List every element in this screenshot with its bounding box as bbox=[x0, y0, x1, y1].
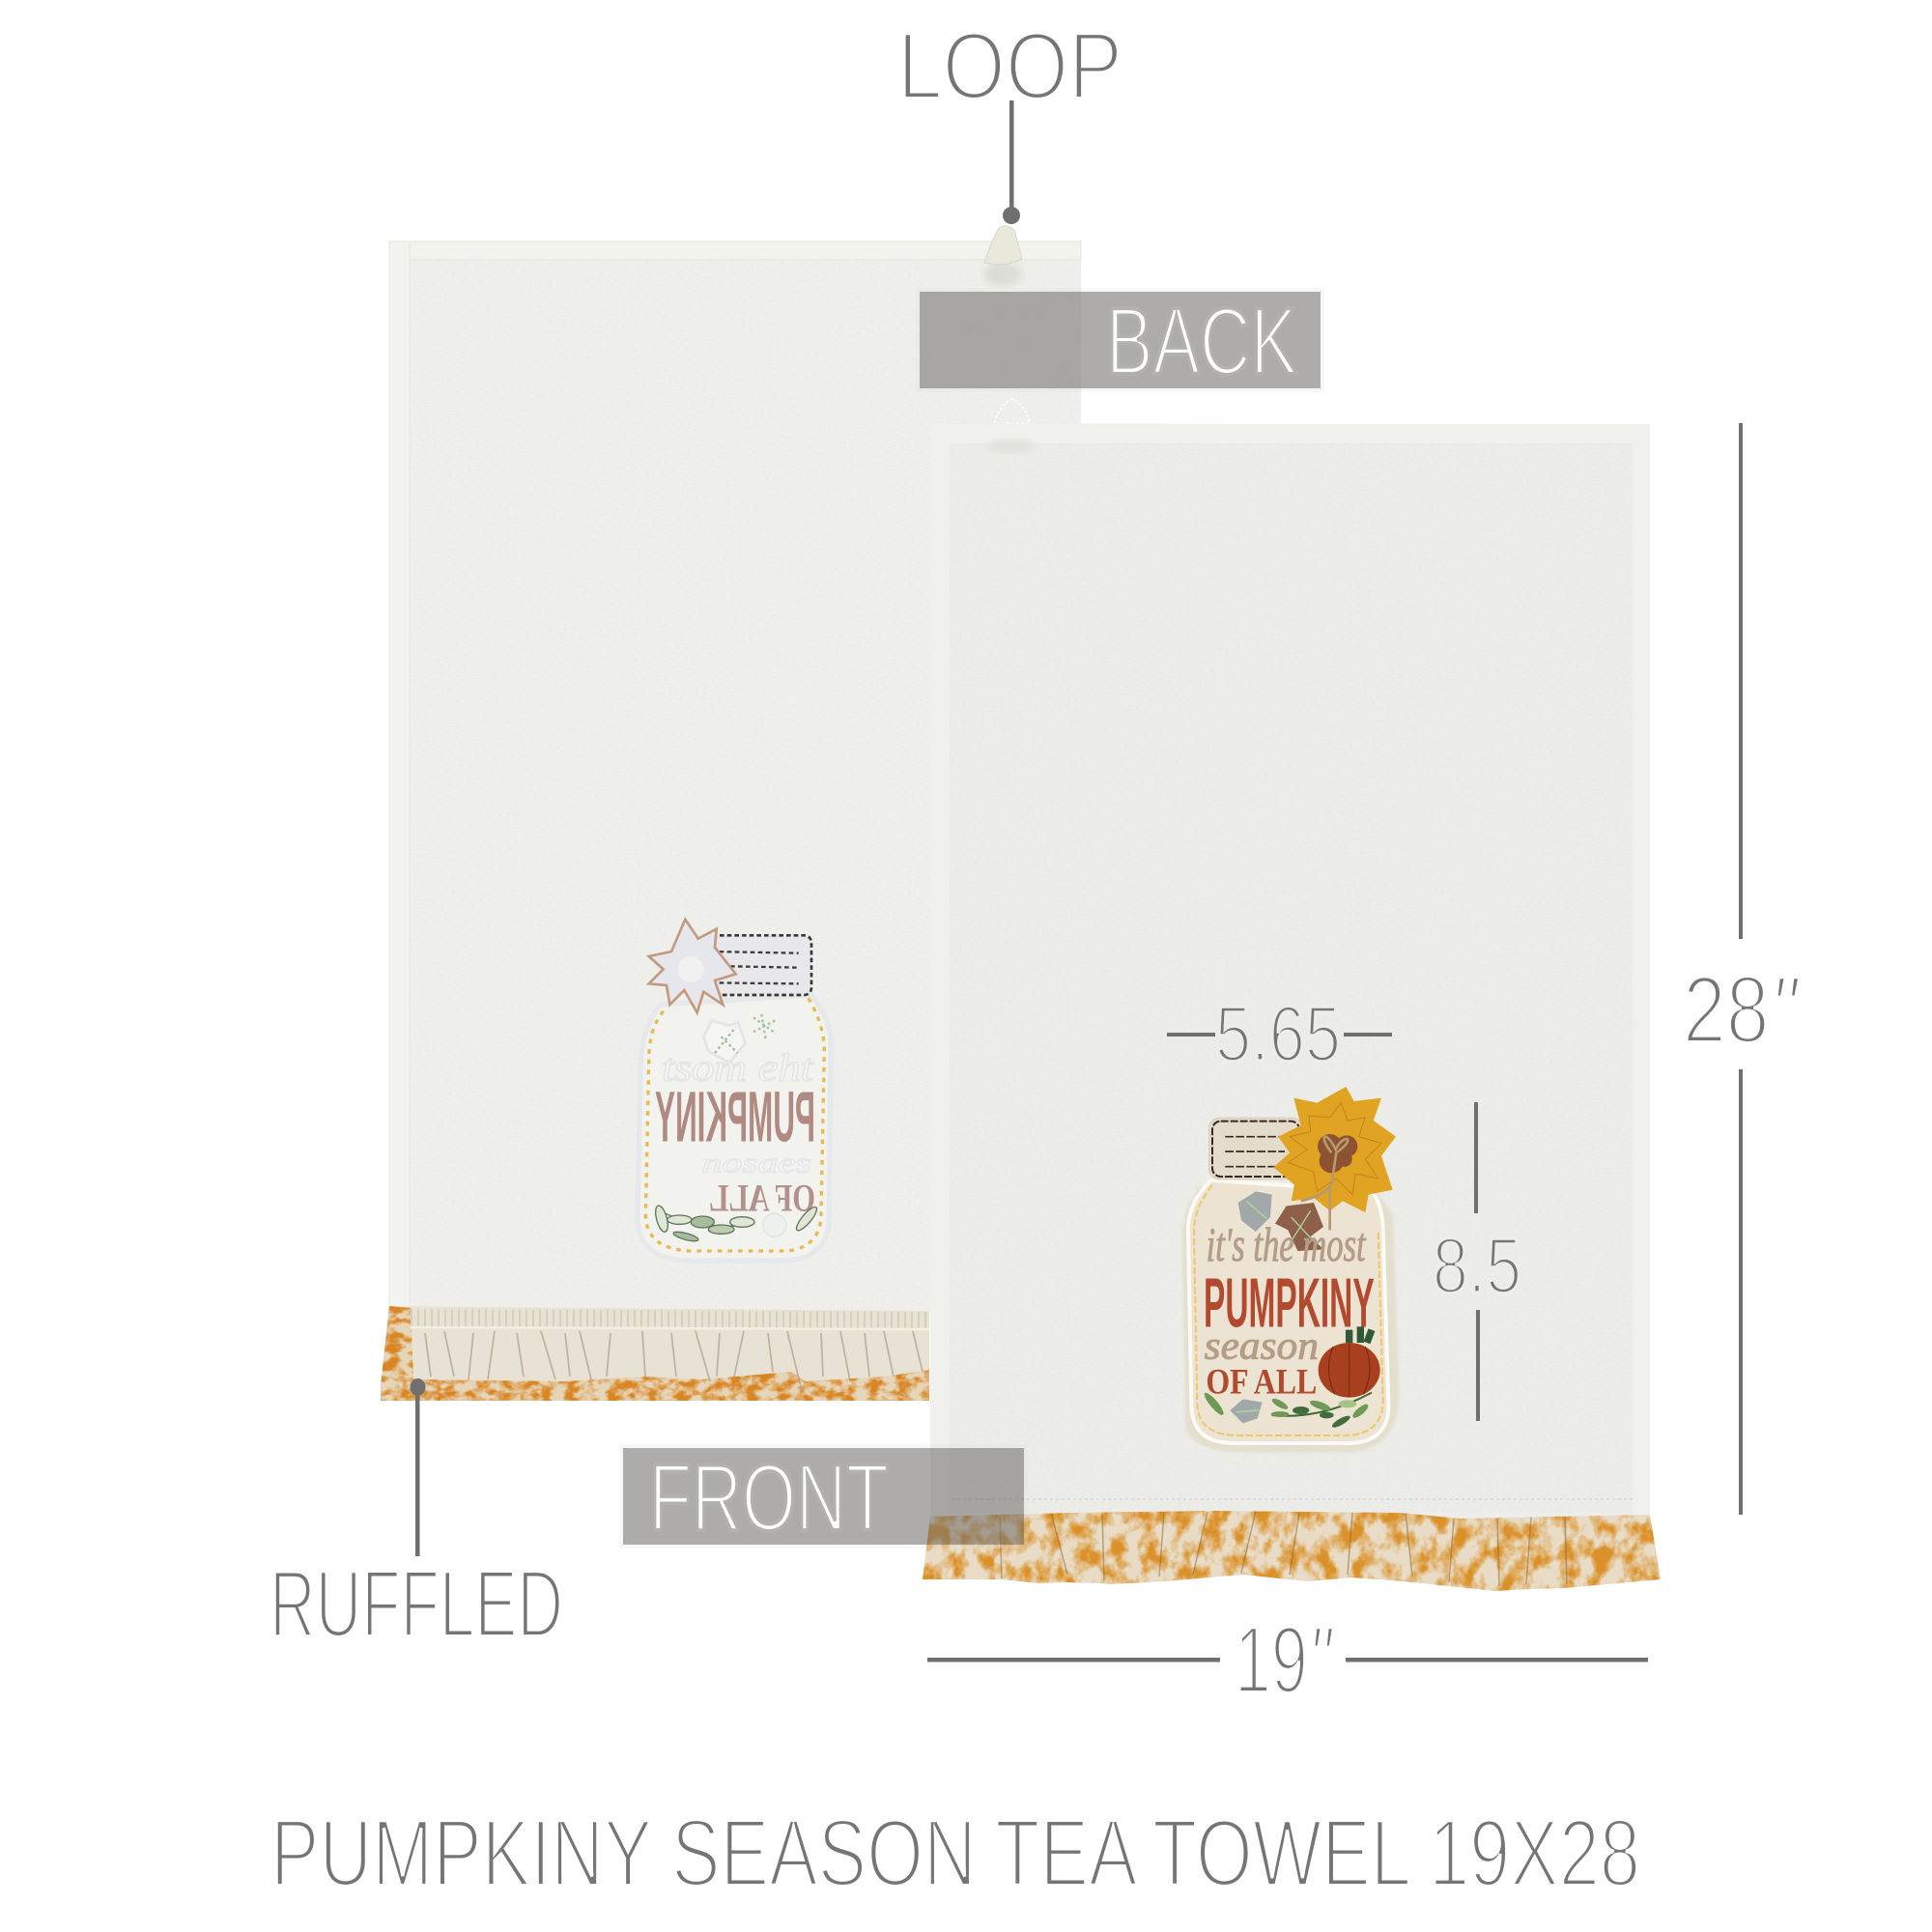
panel: front embroidered jar patch bbox=[1182, 1087, 1399, 1452]
LOOP text: LOOP bbox=[897, 13, 1122, 119]
text: OF ALL: OF ALL bbox=[1206, 1363, 1317, 1403]
front towel fabric grain bbox=[930, 425, 1650, 1513]
twine bow and stem bbox=[1301, 1137, 1348, 1230]
loop shadow bbox=[987, 440, 1034, 453]
jar outline backing bbox=[638, 995, 831, 1261]
upper height line bbox=[1739, 423, 1743, 939]
front towel bottom stitch line bbox=[952, 1498, 1633, 1500]
green vine sprig bbox=[1202, 1391, 1372, 1430]
width label: 19" bbox=[1235, 1606, 1334, 1713]
callout: RUFFLED bbox=[270, 1378, 563, 1657]
lid bbox=[705, 935, 811, 995]
front towel hems bbox=[930, 424, 1650, 1516]
back ruffle cream body bbox=[381, 1306, 929, 1399]
front ruffle pleats bbox=[1000, 1511, 1567, 1586]
LOOP leader dot bbox=[1003, 207, 1020, 224]
script text: season: season bbox=[1205, 1324, 1319, 1369]
left width line bbox=[927, 1658, 1220, 1662]
panel: back embroidered jar bbox=[638, 920, 831, 1261]
callout: LOOP bbox=[897, 13, 1122, 224]
RUFFLED leader dot bbox=[410, 1378, 425, 1396]
loop shadow on back towel bbox=[983, 263, 1022, 286]
back ruffle orange band bbox=[377, 1304, 932, 1401]
back ruffle pleats bbox=[411, 1318, 929, 1391]
faint white script text: tsom eht bbox=[662, 1045, 814, 1089]
front ruffle mottled orange bbox=[923, 1511, 1661, 1591]
green sprig bbox=[653, 1205, 819, 1243]
BACK bar halo bbox=[916, 288, 1324, 392]
back towel fabric grain bbox=[389, 242, 1081, 1312]
yellow dashed jar stitching bbox=[645, 998, 824, 1251]
pale flower centre bbox=[678, 956, 703, 982]
panel: front towel bbox=[930, 399, 1650, 1520]
panel: back ruffle bbox=[377, 1304, 932, 1401]
dimension: width 19 inches bbox=[927, 1606, 1648, 1713]
yellow jar stitching bbox=[1194, 1185, 1383, 1435]
jar body bbox=[1188, 1180, 1388, 1443]
star flower back bbox=[649, 920, 736, 1012]
back towel body bbox=[389, 242, 1081, 1312]
faint season text: nosaes bbox=[702, 1147, 811, 1179]
upper patch height line bbox=[1474, 1102, 1478, 1213]
lower patch height line bbox=[1476, 1310, 1480, 1421]
label bar: FRONT bbox=[619, 1444, 1028, 1550]
dimension: patch height 8.5 bbox=[1433, 1102, 1521, 1421]
back towel left hem bbox=[389, 242, 410, 1312]
dimension: height 28 inches bbox=[1683, 423, 1800, 1515]
frayed burlap backing bbox=[1182, 1185, 1399, 1452]
dimension: patch width 5.65 bbox=[1167, 990, 1392, 1078]
BACK text: BACK bbox=[1106, 288, 1297, 394]
brown leaf bbox=[1275, 1203, 1323, 1251]
patch height label: 8.5 bbox=[1433, 1222, 1521, 1310]
pale leaves with green stitches bbox=[703, 1014, 778, 1063]
panel: front ruffle bbox=[923, 1511, 1661, 1591]
BACK bar bbox=[920, 292, 1321, 388]
RUFFLED text: RUFFLED bbox=[270, 1550, 563, 1657]
flower brown centre bbox=[1318, 1134, 1357, 1173]
back towel loop bbox=[984, 226, 1022, 265]
back towel top hem bbox=[389, 242, 1081, 260]
jar lid bbox=[1209, 1118, 1302, 1179]
text: PUMPKINY bbox=[655, 1077, 815, 1157]
FRONT text: FRONT bbox=[649, 1444, 889, 1550]
front towel loop bbox=[994, 399, 1030, 423]
right patch width line bbox=[1344, 1033, 1392, 1037]
lower height line bbox=[1739, 1069, 1743, 1515]
front towel body bbox=[930, 423, 1650, 1520]
mirrored OF ALL stitching: OF ALL bbox=[709, 1176, 815, 1219]
script text: it's the most: it's the most bbox=[1207, 1217, 1366, 1271]
panel: back towel bbox=[389, 226, 1081, 1312]
height label: 28" bbox=[1683, 956, 1800, 1063]
yellow felt flower bbox=[1273, 1087, 1396, 1230]
patch width label: 5.65 bbox=[1215, 990, 1341, 1078]
grey blue leaves bbox=[1230, 1191, 1272, 1423]
lid stitch lines bbox=[712, 952, 799, 983]
LOOP leader line bbox=[1009, 100, 1014, 215]
front ruffle base bbox=[923, 1511, 1661, 1591]
FRONT bar halo bbox=[619, 1444, 1028, 1548]
pumpkin bbox=[1319, 1326, 1380, 1398]
RUFFLED leader line bbox=[415, 1387, 419, 1556]
right width line bbox=[1346, 1658, 1648, 1662]
label bar: BACK bbox=[916, 288, 1324, 394]
left patch width line bbox=[1167, 1033, 1215, 1037]
panel: front embroidered jar patch: PUMPKINY bbox=[1204, 1264, 1375, 1342]
flower inner stitched star bbox=[1288, 1103, 1381, 1195]
FRONT bar bbox=[623, 1448, 1024, 1545]
